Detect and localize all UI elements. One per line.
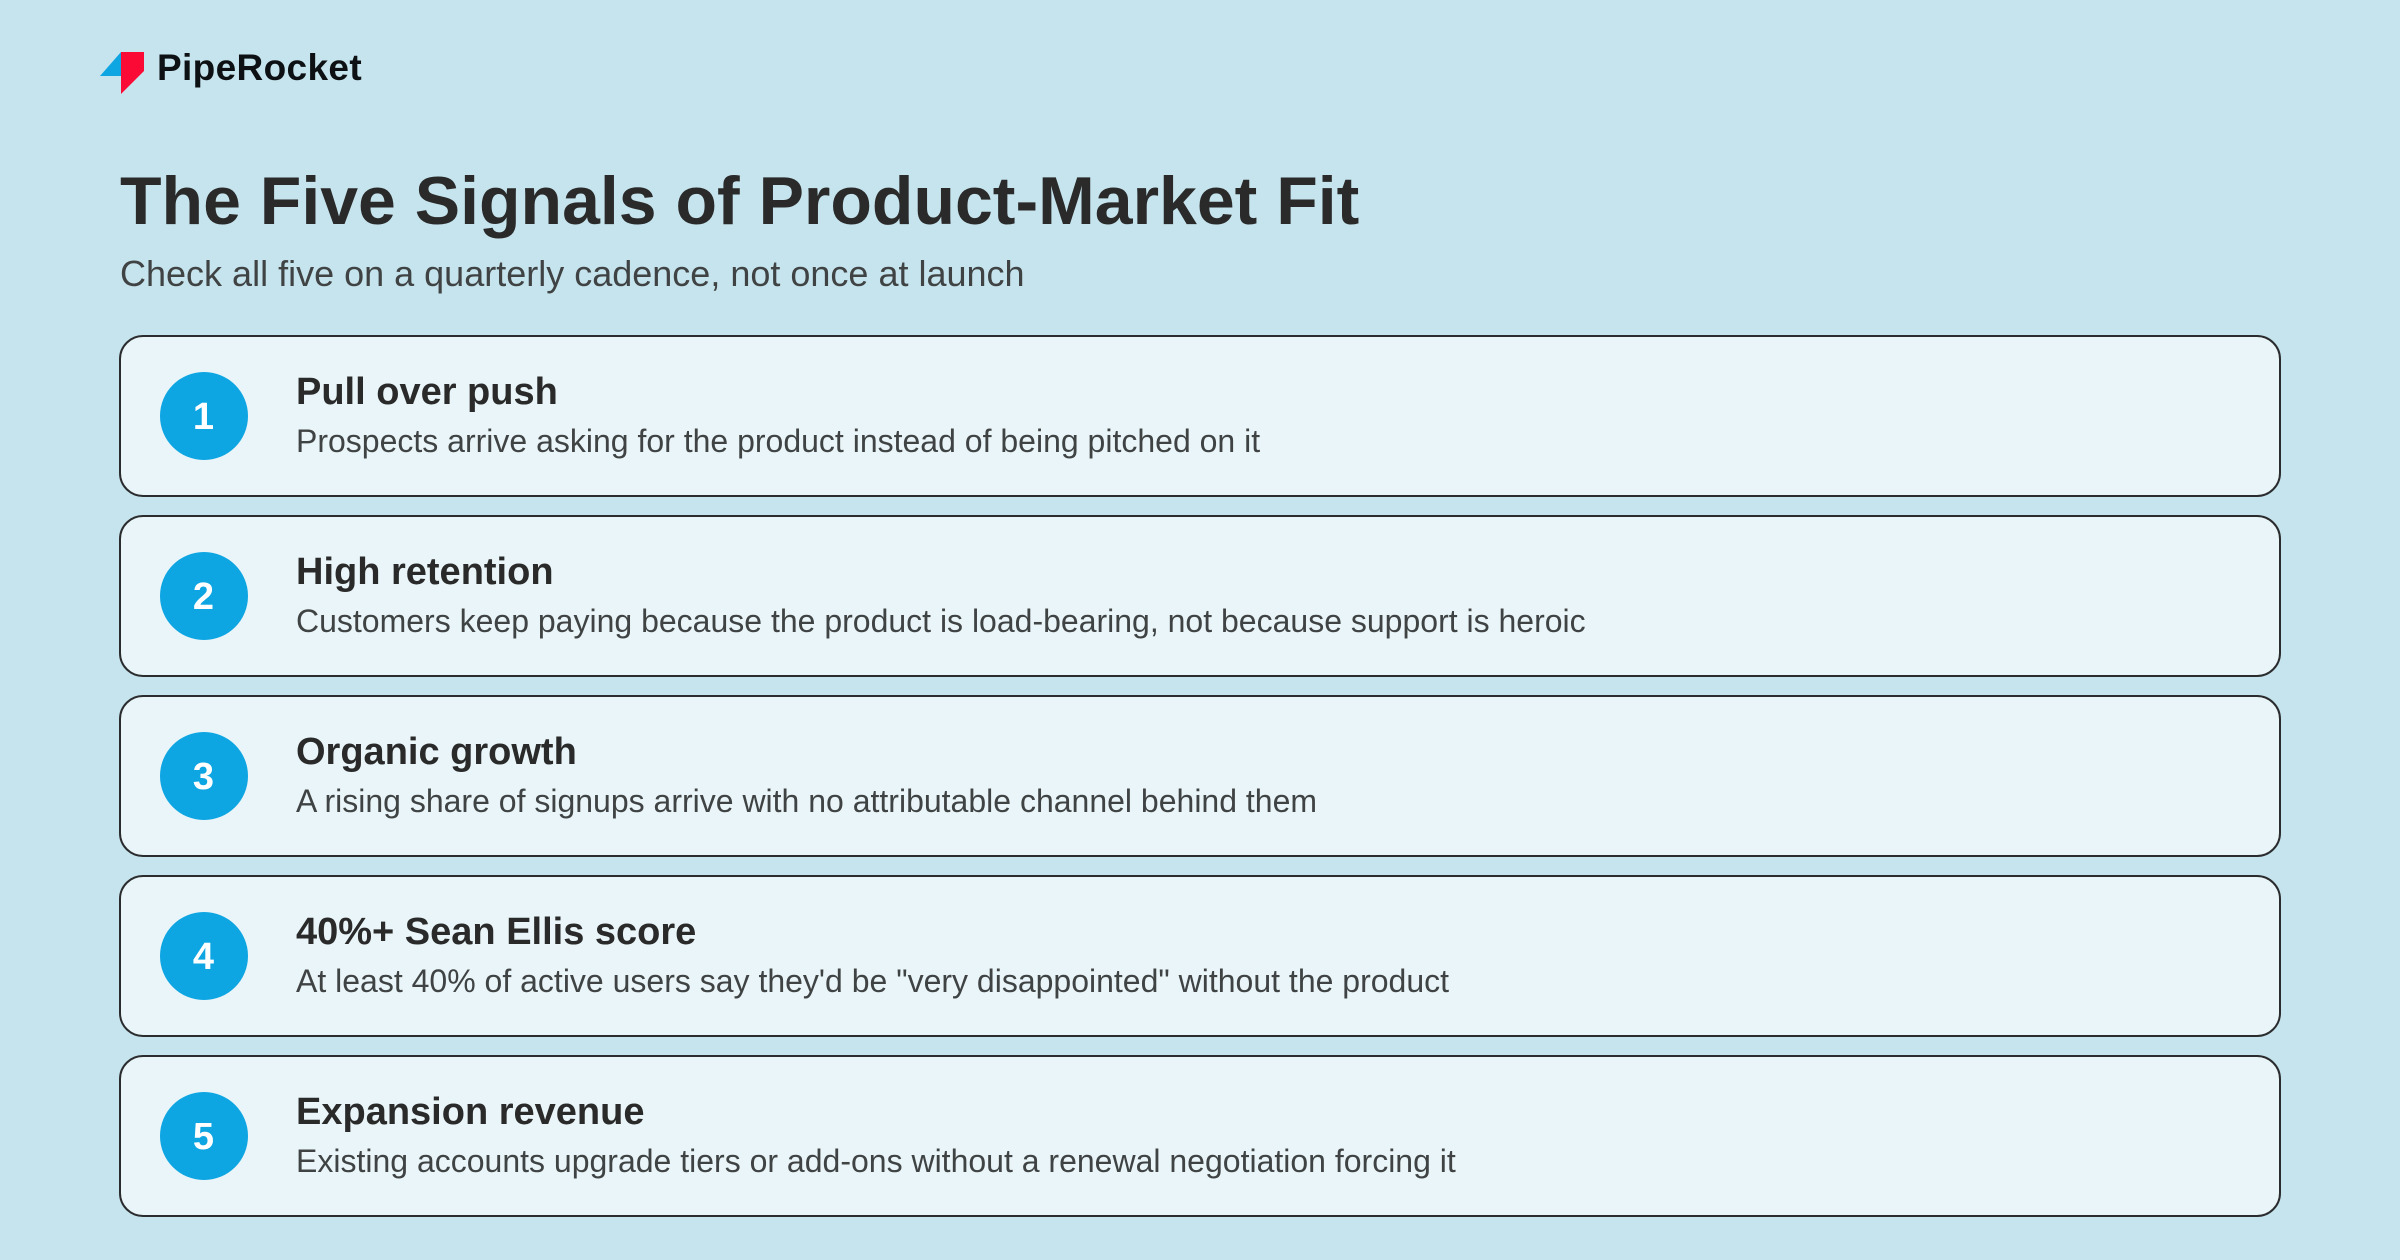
panel: signal 4	[119, 875, 2281, 1037]
description: signal 1: Prospects arrive asking for the product instead of being pitched on it	[296, 423, 1260, 459]
description: signal 4: At least 40% of active users say they'd be "very disappointed" without the product	[296, 963, 1449, 999]
number badge 4	[160, 912, 248, 1000]
icon: rocket mark	[100, 52, 144, 94]
number badge 1: 1	[193, 396, 214, 438]
heading: signal 4: 40%+ Sean Ellis score	[296, 911, 696, 953]
heading: signal 1: Pull over push	[296, 371, 558, 413]
number badge 5: 5	[193, 1116, 214, 1158]
number badge 2	[160, 552, 248, 640]
panel: signal 3	[119, 695, 2281, 857]
description: signal 5: Existing accounts upgrade tiers or add-ons without a renewal negotiation forcing it	[296, 1143, 1456, 1179]
title: The Five Signals of Product-Market Fit	[120, 163, 1359, 239]
panel: signal 2	[119, 515, 2281, 677]
heading: signal 3: Organic growth	[296, 731, 577, 773]
number badge 4: 4	[193, 936, 214, 978]
number badge 1	[160, 372, 248, 460]
number badge 2: 2	[193, 576, 214, 618]
heading: signal 2: High retention	[296, 551, 554, 593]
number badge 5	[160, 1092, 248, 1180]
heading: signal 5: Expansion revenue	[296, 1091, 644, 1133]
description: signal 3: A rising share of signups arrive with no attributable channel behind them	[296, 783, 1317, 819]
panel: signal 1	[119, 335, 2281, 497]
number badge 3: 3	[193, 756, 214, 798]
number badge 3	[160, 732, 248, 820]
panel: signal 5	[119, 1055, 2281, 1217]
wordmark: PipeRocket	[157, 47, 362, 88]
subtitle: Check all five on a quarterly cadence, not once at launch	[120, 253, 1025, 294]
description: signal 2: Customers keep paying because the product is load-bearing, not because support is heroic	[296, 603, 1586, 639]
logo: PipeRocket	[100, 47, 362, 94]
